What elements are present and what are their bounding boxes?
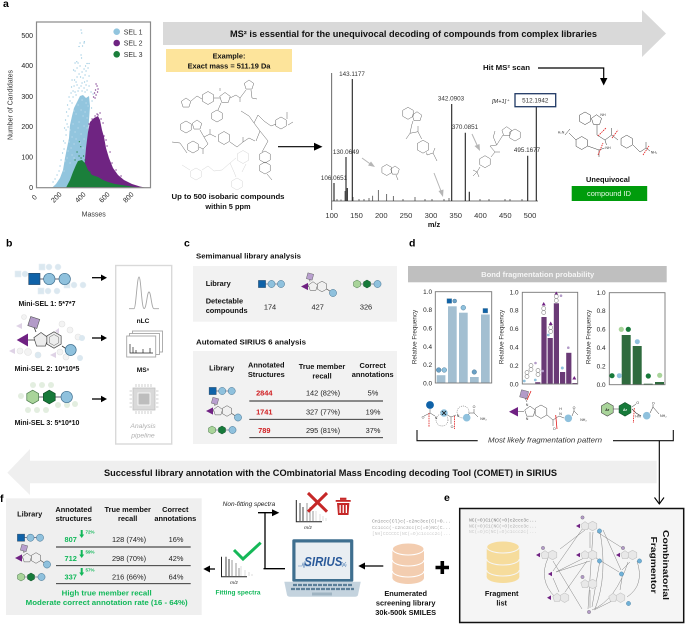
- fragmentation network: [536, 516, 642, 614]
- compound ID badge: [572, 186, 647, 201]
- bar chart 1: [412, 289, 492, 388]
- fragment SMILES: NC(=O)C1(NC(=O)c2ccc3c...: [469, 518, 537, 524]
- y tick labels: [21, 33, 33, 192]
- header bar: [408, 266, 667, 282]
- x tick labels: [325, 211, 536, 220]
- automated SIRIUS table: 5%: [368, 388, 379, 398]
- hit scan label: Hit MS² scan: [483, 63, 531, 72]
- annotated counts with reductions: 59%: [86, 550, 95, 554]
- results background: [6, 498, 202, 615]
- fragmentor title: [649, 530, 671, 600]
- laptop: SIRIUS: SIRIUS: [304, 554, 343, 569]
- automated SIRIUS table: recall: [312, 372, 332, 380]
- x tick labels: 100: [325, 211, 338, 220]
- y tick labels: 400: [21, 63, 33, 70]
- banner arrow: MS2 is essential: [163, 10, 666, 57]
- fragment list caption: list: [496, 598, 508, 608]
- major peaks: [334, 79, 536, 201]
- fitting label: Fitting spectra: [216, 590, 261, 596]
- fragmentation pattern structure 1: NH₂: [480, 417, 487, 421]
- plot frame: [36, 22, 150, 188]
- peak labels: 130.0649: [333, 149, 360, 156]
- SEL 1 cloud: [52, 30, 93, 188]
- nLC chromatogram: [129, 277, 159, 309]
- automated SIRIUS table: Structures: [248, 370, 285, 379]
- bar chart 3: 0.6: [597, 327, 606, 334]
- automated SIRIUS table: 789: [258, 426, 270, 435]
- label c: c: [184, 238, 190, 250]
- spectrum axes: [331, 73, 538, 210]
- correct column: 64%: [169, 572, 184, 582]
- fragment list caption: Fragment: [485, 589, 519, 598]
- bar chart 2: Relative Frequency: [498, 309, 506, 364]
- semimanual heading: Semimanual library analysis: [196, 252, 301, 260]
- summary text: High true member recall: [62, 588, 152, 598]
- library icons: [15, 534, 51, 581]
- fragmentation pattern structure 2: N: [526, 403, 529, 407]
- fragmentation pattern structure 3: NH₂: [660, 414, 667, 418]
- arrow: fitting spectra to table: [203, 566, 215, 572]
- correct column: 16%: [169, 535, 184, 544]
- panel d: bond fragmentation: [408, 238, 673, 445]
- table headers: structures: [56, 514, 92, 523]
- x tick labels: 250: [400, 211, 412, 220]
- bar chart 1: 0.8: [423, 307, 432, 314]
- fragmentation pattern structure 2: N: [559, 412, 562, 416]
- mini spectrum: [296, 500, 326, 522]
- x axis title: m/z: [428, 220, 440, 229]
- fragmentation pattern structure 2: N: [526, 417, 529, 421]
- analysis pipeline box: [116, 266, 172, 444]
- non-fitting label: Non-fitting spectra: [223, 501, 276, 508]
- peak labels: [321, 71, 541, 182]
- plus sign: [436, 561, 449, 574]
- peak labels: 370.0851: [452, 124, 479, 131]
- fragmentation pattern structure 1: N: [435, 416, 438, 420]
- recall column: 128 (74%): [112, 535, 146, 544]
- bar chart 2: 0.0: [510, 382, 519, 388]
- MS2 spectrum: [321, 71, 556, 229]
- molecule 2: [172, 120, 255, 154]
- x tick labels: 450: [499, 211, 512, 220]
- bar chart 2: 0.6: [510, 326, 519, 333]
- analysis pipeline caption: pipeline: [130, 432, 155, 440]
- arrow: hit scan to compound: [538, 68, 607, 86]
- screening library caption: [375, 589, 436, 617]
- table headers: Annotated: [55, 505, 92, 514]
- automated SIRIUS table: [193, 351, 397, 444]
- analysis pipeline caption: Analysis: [129, 423, 156, 430]
- red cross: [308, 493, 327, 512]
- fragmentation pattern structure 1: O: [451, 425, 454, 429]
- arrow: bracket down to fragmentor: [654, 441, 664, 504]
- unequivocal label: Unequivocal: [586, 175, 630, 184]
- bracket: most likely fragmentation pattern: [417, 430, 673, 445]
- banner arrow: MS2 is essential: MS² is essential for the unequivocal decoding of compounds from complex libraries: [230, 29, 597, 39]
- fragment structure middle: [403, 107, 437, 161]
- automated SIRIUS table: Annotated: [248, 360, 285, 370]
- precursor label: [M+1]⁺: [491, 99, 510, 105]
- x tick labels: 400: [74, 191, 88, 205]
- decoded compound structure: NH: [600, 113, 606, 117]
- correct column: [169, 535, 184, 582]
- fragmentation pattern structure 1: [422, 401, 487, 429]
- panel f: results table: [0, 493, 202, 615]
- recall column: [112, 535, 146, 582]
- label b: b: [6, 238, 12, 250]
- fragment SMILES: [469, 518, 537, 535]
- compound ID badge: compound ID: [587, 189, 631, 198]
- x tick labels: 800: [122, 191, 136, 205]
- mini-SEL 3: Mini-SEL 3: 5*10*10: [15, 420, 80, 427]
- x tick labels: 200: [375, 211, 388, 220]
- fragmentation pattern structure 2: O: [573, 406, 576, 410]
- legend: SEL 1: [124, 29, 143, 36]
- label e: e: [444, 492, 450, 504]
- panel a: library scatter and MS2 example: [3, 0, 666, 229]
- summary text: [26, 588, 188, 607]
- bar chart 2: 1.0: [510, 290, 519, 296]
- semimanual panel: 174: [264, 302, 276, 312]
- bar chart 2: 0.2: [510, 363, 519, 370]
- mini-SEL 2: [9, 314, 85, 373]
- precursor box: [515, 94, 556, 107]
- minor peaks: [337, 190, 522, 201]
- semimanual panel: 427: [312, 302, 324, 312]
- automated SIRIUS table: 327 (77%): [306, 408, 340, 416]
- panel b: mini libraries: [6, 238, 172, 444]
- isobaric compound structures: within 5 ppm: [204, 202, 251, 211]
- semimanual panel: Detectable: [206, 296, 243, 306]
- legend: SEL 3: [124, 52, 143, 59]
- y tick labels: 200: [21, 124, 33, 131]
- x tick labels: 0: [31, 194, 39, 202]
- fragmentation pattern structure 3: [601, 401, 667, 423]
- isobaric compound structures: Up to 500 isobaric compounds: [172, 192, 284, 201]
- m/z: m/z: [230, 580, 238, 586]
- fragment structure right: [473, 127, 520, 177]
- decoded compound structure: NH₂: [651, 150, 658, 154]
- x tick labels: 350: [449, 211, 462, 220]
- automated SIRIUS table: 2844: [256, 388, 273, 398]
- automated SIRIUS table: True member: [299, 362, 345, 371]
- decoded compound structure: H₂N: [558, 130, 565, 134]
- fragmentation pattern structure 3: O: [652, 402, 655, 406]
- semimanual panel: [193, 266, 397, 322]
- scatter chart: candidates vs masses: [8, 22, 150, 218]
- bar chart 3: 1.0: [597, 290, 606, 297]
- panel e: combinatorial fragmentor: [460, 508, 684, 622]
- x axis title: Masses: [82, 212, 106, 218]
- molecule 1: [181, 80, 257, 122]
- mini-SEL 1: Mini-SEL 1: 5*7*7: [18, 301, 76, 308]
- laptop: SIRIUS: [284, 539, 361, 597]
- chip icon: [130, 384, 158, 414]
- x tick labels: 150: [350, 211, 363, 220]
- gray fragment arrows: [362, 134, 480, 197]
- y tick labels: 500: [21, 33, 33, 40]
- bar chart 3: 0.2: [597, 364, 606, 371]
- recall column: 216 (66%): [112, 572, 146, 582]
- analysis pipeline caption: [129, 423, 156, 440]
- fragmentation pattern structure 3: Ar: [605, 408, 610, 412]
- annotated counts with reductions: 57%: [86, 568, 95, 572]
- table headers: Correct: [162, 505, 189, 514]
- annotated counts with reductions: [65, 530, 95, 582]
- fragmentor frame: [460, 508, 684, 622]
- fragmentation pattern structure 2: NH₂: [580, 418, 587, 422]
- molecule 3: [241, 111, 293, 180]
- bar chart 1: 1.0: [423, 289, 432, 296]
- fragmentor title: Fragmentor: [649, 536, 659, 594]
- isobaric compound structures: [172, 80, 293, 211]
- automated SIRIUS table: 1741: [256, 408, 273, 416]
- bar chart 1: 0.0: [423, 380, 432, 388]
- example box: Example:: [213, 52, 245, 60]
- table headers: [17, 505, 196, 523]
- bar chart 1: 0.6: [423, 326, 432, 332]
- fragmentation pattern structure 2: [509, 390, 587, 431]
- screening library caption: screening library: [376, 598, 436, 608]
- fragmentor title: Combinatorial: [661, 530, 671, 600]
- example box: [166, 49, 292, 72]
- arrow: library to SIRIUS: [358, 562, 383, 570]
- automated SIRIUS table: 19%: [366, 408, 381, 416]
- screening library database icon: [392, 543, 424, 584]
- screening library caption: Enumerated: [384, 589, 428, 598]
- annotated counts with reductions: 337: [65, 572, 77, 582]
- fragment: indole: [382, 164, 399, 180]
- SEL 2 cloud: [84, 84, 146, 188]
- peak labels: 342.0903: [438, 96, 465, 102]
- bar chart 1: Relative Frequency: [412, 309, 418, 364]
- y tick labels: 0: [29, 185, 33, 192]
- fitting spectra: [216, 543, 261, 596]
- table headers: True member: [104, 505, 151, 514]
- label d: d: [409, 238, 415, 250]
- nLC label: nLC: [137, 318, 150, 325]
- screening SMILES strings: [NH]CCCCCC(NC(=O)c1cccc2c(...: [372, 531, 451, 537]
- check mark: [234, 543, 261, 559]
- annotated counts with reductions: 72%: [86, 530, 95, 534]
- y tick labels: 300: [21, 94, 33, 101]
- mini spectrum: [222, 557, 252, 577]
- m/z: m/z: [304, 525, 312, 531]
- x tick labels: 600: [98, 191, 112, 205]
- SEL 3 cloud: [66, 142, 140, 188]
- bracket: most likely fragmentation pattern: Most likely fragmentation pattern: [488, 438, 602, 445]
- fragmentation pattern structure 3: Ar: [623, 408, 628, 412]
- mini-SEL 2: Mini-SEL 2: 10*10*5: [15, 366, 80, 373]
- trash can: [336, 498, 351, 515]
- table headers: Library: [17, 510, 43, 518]
- label f: f: [0, 493, 4, 505]
- panel c: library analysis: [184, 238, 397, 444]
- mini-SEL 1: [15, 264, 86, 308]
- automated SIRIUS table: 142 (82%): [306, 388, 340, 398]
- semimanual panel: compounds: [206, 306, 248, 315]
- bar chart 3: 0.0: [597, 382, 606, 389]
- y tick labels: 100: [21, 154, 33, 162]
- screening SMILES strings: [372, 518, 451, 537]
- bar chart 2: 0.4: [510, 344, 519, 352]
- automated SIRIUS table: annotations: [352, 370, 394, 379]
- annotated counts with reductions: 712: [65, 554, 77, 563]
- annotated counts with reductions: 807: [65, 535, 77, 544]
- automated heading: Automated SIRIUS 6 analysis: [196, 338, 306, 346]
- automated SIRIUS table: 37%: [366, 426, 381, 435]
- fragment SMILES: NC(=O)C1(NC(=O)c2ccc3c...: [469, 524, 537, 530]
- MSn label: MSⁿ: [137, 367, 150, 374]
- fragment list caption: [485, 589, 519, 608]
- precursor box: 512.1942: [522, 98, 549, 104]
- screening SMILES strings: Cn1ccc(Cl)c(-c2nc3cc(C(=O...: [372, 518, 451, 524]
- fragmentation pattern structure 3: O: [636, 401, 639, 405]
- legend: [113, 28, 143, 59]
- screening SMILES strings: Cc1ccc(-c2nc3cc(C(=O)NC(C...: [372, 525, 451, 531]
- fragmentation pattern structure 1: N: [457, 414, 460, 418]
- automated SIRIUS table: 295 (81%): [306, 426, 340, 435]
- peak labels: 495.1677: [514, 147, 541, 154]
- banner arrow: successful library annotation: Successful library annotation with the COmbinatorial Mass Encoding decoding Tool (COMET) in SIRIUS: [104, 468, 557, 478]
- bar chart 2: [498, 290, 578, 388]
- example box: Exact mass = 511.19 Da: [188, 62, 271, 70]
- fragmentation pattern structure 2: O: [553, 427, 556, 431]
- decoded compound structure: NH: [605, 146, 611, 150]
- decoded compound structure: [558, 112, 658, 157]
- mini-SEL 3: [15, 382, 80, 427]
- semimanual panel: Library: [206, 279, 232, 288]
- table headers: annotations: [154, 514, 196, 523]
- bar chart 3: [586, 290, 665, 389]
- banner arrow: successful library annotation: [7, 449, 657, 495]
- bar chart 1: 0.4: [423, 344, 432, 351]
- arrows to pipeline: [92, 274, 107, 402]
- automated SIRIUS table: Correct: [360, 361, 386, 370]
- automated SIRIUS table: Library: [209, 364, 235, 372]
- bar chart 3: Relative Frequency: [586, 309, 592, 364]
- fragmentation pattern structure 3: HN: [635, 414, 641, 418]
- summary text: Moderate correct annotation rate (16 - 64%): [26, 598, 188, 607]
- fragment database icon: [487, 541, 519, 583]
- peak labels: 143.1177: [339, 71, 365, 78]
- fragmentation pattern structure 1: O: [473, 405, 476, 409]
- white speckles in SEL 1: [64, 100, 88, 171]
- semimanual panel: 326: [360, 302, 372, 312]
- arrow to spectrum: [278, 143, 322, 151]
- fragment SMILES: NC(=O)C(NC(=O)c1ccc2c(...: [469, 529, 537, 535]
- MS spectra icon: [127, 331, 162, 357]
- x tick labels: [31, 191, 136, 205]
- header bar: Bond fragmentation probability: [481, 270, 595, 279]
- bar chart 3: 0.8: [597, 308, 606, 315]
- non-fitting spectra discarded: [296, 493, 351, 531]
- legend: SEL 2: [124, 41, 143, 48]
- molecule 4, faded: [182, 150, 249, 190]
- bar chart 1: 0.2: [423, 362, 432, 369]
- fragmentation pattern structure 2: H: [559, 407, 562, 411]
- y axis title: Number of Candidates: [8, 69, 14, 140]
- x tick labels: 400: [474, 211, 487, 220]
- correct column: 42%: [169, 554, 184, 563]
- recall column: 298 (70%): [112, 554, 146, 563]
- bar chart 2: 0.8: [510, 308, 519, 314]
- x tick labels: 200: [50, 191, 64, 205]
- x tick labels: 500: [524, 211, 536, 220]
- x tick labels: 300: [425, 211, 437, 220]
- bar chart 3: 0.4: [597, 345, 606, 352]
- peak labels: 106.0651: [321, 175, 348, 182]
- T connector with arrow to non-fitting spectra: [258, 509, 285, 569]
- table headers: recall: [118, 514, 137, 523]
- screening library caption: 30k-500k SMILES: [375, 608, 436, 617]
- fragmentation pattern structure 1: O: [422, 416, 425, 420]
